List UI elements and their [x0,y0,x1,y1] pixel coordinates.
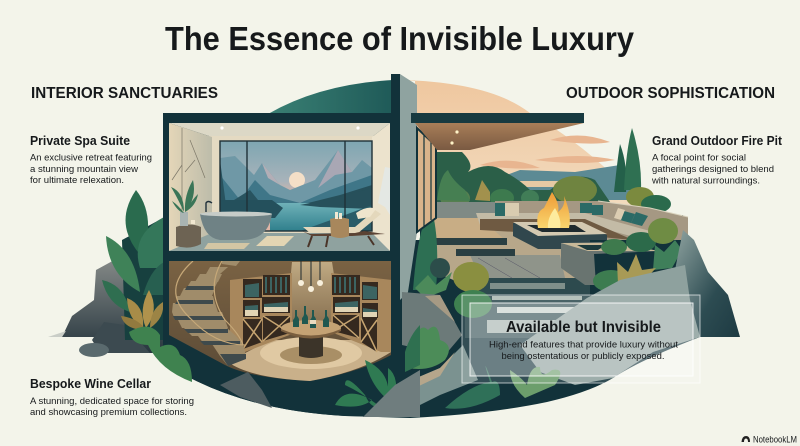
cushions [495,203,648,226]
big swoop rock [520,265,700,385]
side table and plant [171,180,201,248]
callout: available but invisible: Available but Invisible [506,319,661,336]
spa room [169,123,390,251]
title: The Essence of Invisible Luxury [165,20,635,57]
floor [228,340,391,381]
right leaf [405,325,420,372]
stone planter [561,242,660,285]
leaves [335,360,396,407]
left foliage and rocks [48,190,165,357]
bathtub [200,212,272,240]
text block: private spa suite: for ultimate relexation. [30,175,124,186]
text block: private spa suite: An exclusive retreat featuring [30,152,152,164]
lower left swoop [400,345,478,415]
sofa [476,213,650,240]
text block: grand outdoor fire pit [651,134,783,186]
left bottles [245,277,288,316]
bottom centre foliage and rocks [129,325,420,417]
lake [270,203,372,231]
peach dome and sky [400,80,632,215]
heading: outdoor sophistication: OUTDOOR SOPHISTICATION [566,85,775,102]
green dome [268,80,393,114]
bottom plants [445,366,500,409]
frame of rooms [163,113,400,417]
wine bottles [293,306,329,328]
stair rail [176,261,245,345]
right shelves [331,273,392,352]
fire pit [513,223,607,249]
text block: bespoke wine cellar: A stunning, dedicated space for storing [30,396,194,407]
left shelves [230,273,292,352]
text block: bespoke wine cellar [30,377,194,418]
text block: private spa suite [30,134,152,186]
rock [363,370,420,417]
upper left rock [402,292,462,355]
stair shading [173,286,246,366]
callout: available but invisible [462,295,700,383]
mountains [220,150,372,205]
text block: grand outdoor fire pit: A focal point for social [652,152,746,164]
back wall [437,202,495,218]
small rock [220,372,272,408]
spiral staircase [172,261,246,366]
steps [430,238,507,245]
ceiling lights [220,126,224,130]
callout: available but invisible: High-end features that provide luxury without [489,340,678,350]
heading: interior sanctuaries: INTERIOR SANCTUARIES [31,85,218,102]
roof overhang [411,113,584,150]
plant backing right [590,240,690,300]
text block: bespoke wine cellar: Bespoke Wine Cellar [30,377,151,391]
rocks left [62,258,165,353]
text block: grand outdoor fire pit: with natural surroundings. [651,176,760,186]
stone wall left [169,123,212,251]
lower right rocks and plants [400,265,700,415]
near plants left [413,208,437,290]
glass door [417,128,436,232]
building facade [400,74,417,300]
cypress trees [614,144,626,192]
right wall [372,123,390,251]
room divider [163,252,400,261]
lit back wall [286,262,342,325]
ceiling [169,123,390,137]
lower stairs [465,278,600,338]
wine cellar [169,261,392,381]
text block: grand outdoor fire pit: gatherings designed to blend [652,164,774,175]
callout: available but invisible: being ostentatious or publicly exposed. [502,351,664,362]
back wall [209,136,379,236]
distant bushes [437,152,612,205]
floor mats [204,243,250,249]
column [391,74,400,383]
text block: grand outdoor fire pit: Grand Outdoor Fire Pit [652,134,783,148]
text block: private spa suite: a stunning mountain view [30,164,138,175]
cellar room [169,261,391,381]
planter bushes [601,239,627,255]
outdoor terrace scene [413,128,690,338]
window mullions [247,141,345,231]
green bush left [129,327,192,382]
dark base shape [163,215,700,418]
leaf dark backing [122,218,163,340]
distant hills and water [440,165,640,200]
right rock [675,230,740,337]
right bottles [334,277,377,317]
pendant lights [298,261,323,292]
lounge chair [302,208,385,247]
text block: private spa suite: Private Spa Suite [30,134,130,148]
towel [378,167,390,215]
flames [537,192,570,228]
central illustration [48,74,740,418]
leaves [126,190,148,258]
floor [169,233,390,251]
text block: bespoke wine cellar: and showcasing premium collections. [30,407,187,418]
table [281,320,341,358]
terrace floor [420,218,590,285]
green plant [407,327,449,369]
window view [220,141,372,231]
